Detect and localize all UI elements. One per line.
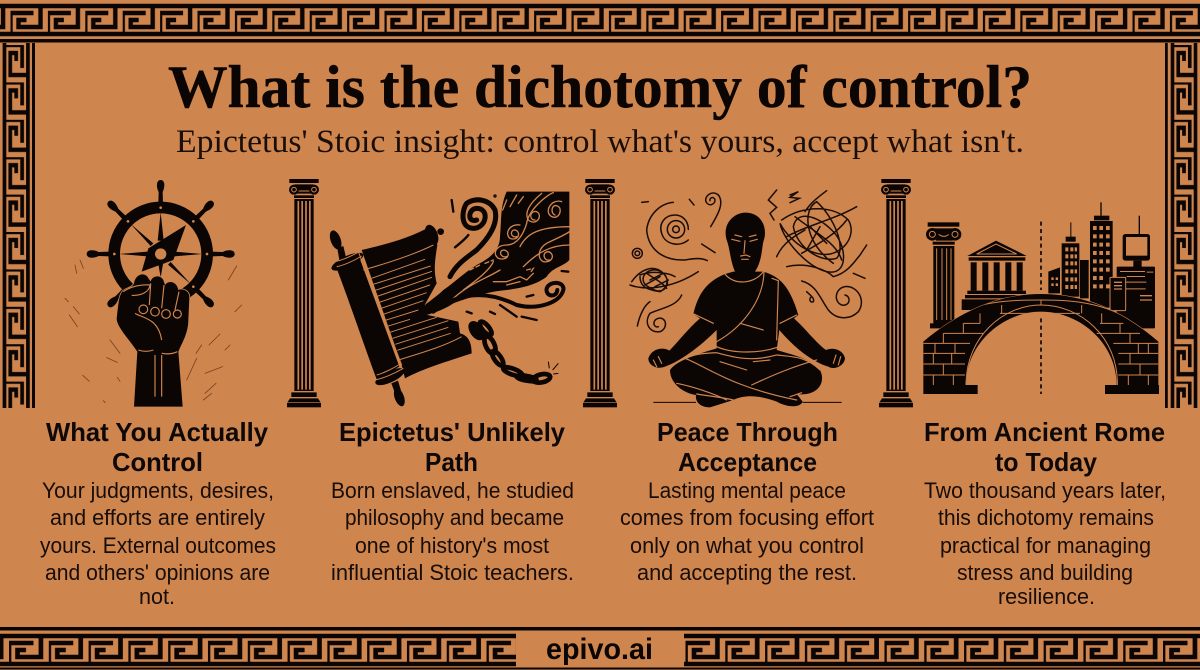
- body text: stress and building: [957, 560, 1133, 585]
- body text: and accepting the rest.: [637, 560, 857, 585]
- body text: [924, 478, 1166, 609]
- body text: not.: [139, 584, 175, 609]
- body text: only on what you control: [630, 533, 864, 558]
- column divider 1: [287, 179, 321, 407]
- subtitle: Epictetus' Stoic insight: control what's yours, accept what isn't.: [176, 124, 1024, 160]
- column divider 3: [879, 179, 913, 407]
- heading: From Ancient Rome: [924, 417, 1165, 447]
- panel: Epictetus' unlikely path: [331, 417, 574, 585]
- bottom meander border: [0, 627, 1200, 670]
- title: What is the dichotomy of control?: [168, 54, 1032, 120]
- heading: [924, 417, 1165, 477]
- body text: comes from focusing effort: [620, 505, 874, 530]
- heading: to Today: [995, 447, 1098, 477]
- body text: Born enslaved, he studied: [331, 478, 574, 503]
- body text: [40, 478, 276, 609]
- body text: this dichotomy remains: [938, 505, 1154, 530]
- body text: Your judgments, desires,: [42, 478, 274, 503]
- icon: hand gripping ship wheel: [65, 180, 242, 407]
- body text: yours. External outcomes: [40, 533, 276, 558]
- column divider 2: [583, 179, 617, 407]
- body text: one of history's most: [355, 533, 549, 558]
- body text: Lasting mental peace: [648, 478, 846, 503]
- body text: Two thousand years later,: [924, 478, 1166, 503]
- panel: peace through acceptance: [620, 417, 874, 585]
- body text: [620, 478, 874, 585]
- heading: [46, 417, 269, 477]
- heading: [657, 417, 838, 477]
- body text: resilience.: [998, 584, 1095, 609]
- heading: Peace Through: [657, 417, 838, 447]
- footer brand: epivo.ai: [546, 633, 653, 666]
- heading: Control: [112, 447, 203, 477]
- heading: Acceptance: [678, 447, 817, 477]
- panel: what you actually control: [40, 417, 276, 609]
- left meander border: [2, 43, 35, 408]
- icon: bridge from Roman temple to modern city: [920, 202, 1162, 394]
- heading: [339, 417, 566, 477]
- body text: and others' opinions are: [45, 560, 270, 585]
- heading: Epictetus' Unlikely: [339, 417, 566, 447]
- right meander border: [1165, 43, 1200, 408]
- icon: meditating figure with swirling thoughts: [630, 190, 867, 407]
- heading: What You Actually: [46, 417, 269, 447]
- body text: influential Stoic teachers.: [331, 560, 574, 585]
- icon: scroll with flowing swirls and broken chain: [328, 192, 569, 408]
- body text: practical for managing: [940, 533, 1151, 558]
- panel: from ancient Rome to today: [924, 417, 1166, 609]
- body text: philosophy and became: [345, 505, 564, 530]
- body text: and efforts are entirely: [50, 505, 265, 530]
- top meander border: [0, 0, 1200, 42]
- body text: [331, 478, 574, 585]
- heading: Path: [425, 447, 478, 477]
